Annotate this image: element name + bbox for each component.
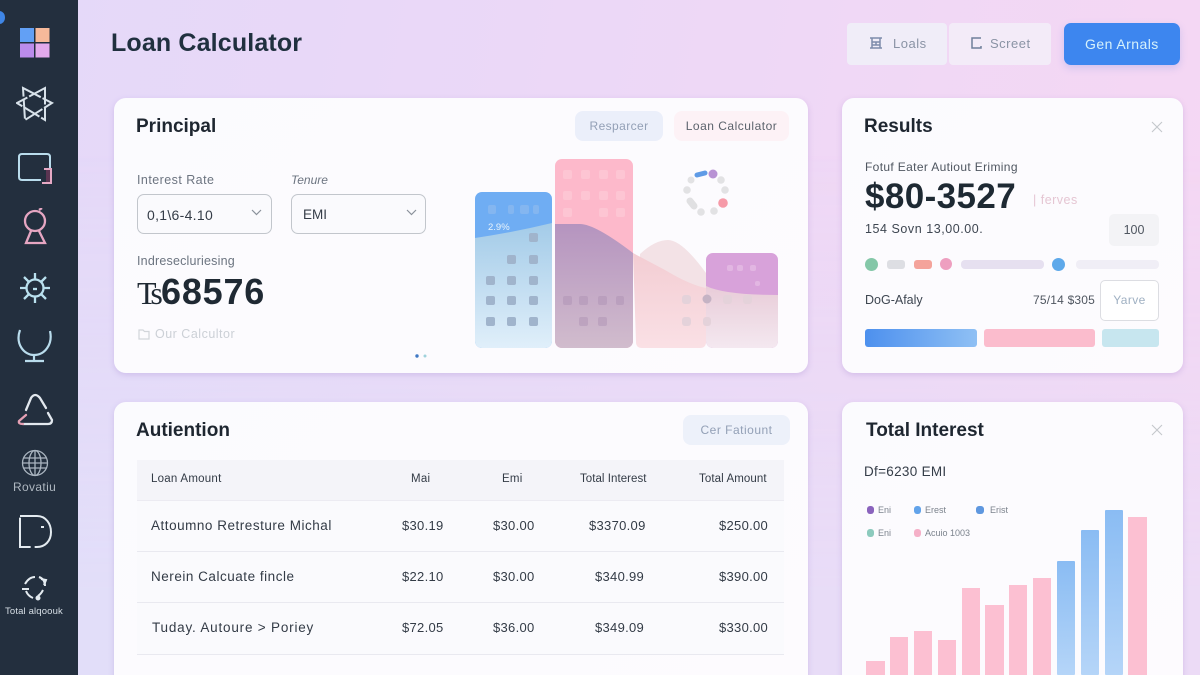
row 3: $330.00 [719, 620, 768, 635]
icon: document [19, 515, 52, 548]
dot grid [486, 233, 538, 326]
row 3: $36.00 [493, 620, 535, 635]
blue bar [475, 192, 552, 348]
button: Gen Arnals [1064, 23, 1180, 65]
select: tenure [291, 194, 426, 234]
row 2: $390.00 [719, 569, 768, 584]
table header row: Total Interest [580, 473, 647, 485]
title: Loan Calculator [111, 29, 302, 57]
button: Yarve [1100, 280, 1159, 321]
icon: share [971, 37, 982, 49]
row value: 75/14 $305 [1033, 293, 1095, 307]
icon: dashboard tiles [20, 28, 50, 58]
icon: globe stand [17, 330, 52, 362]
tab: Cer Fatiount [683, 415, 790, 445]
select: tenure: EMI [303, 207, 327, 222]
icon: device [18, 153, 52, 184]
chart: illustrated bars and area [475, 159, 778, 348]
progress indicators [865, 258, 1159, 271]
row 1: $3370.09 [589, 518, 646, 533]
tab: Loan Calculator: Loan Calculator [686, 119, 777, 133]
button: Yarve: Yarve [1113, 293, 1146, 307]
table header row: Total Amount [699, 473, 767, 485]
purple bar [706, 253, 778, 348]
bar: light blue [1102, 329, 1159, 347]
bar: blue [865, 329, 977, 347]
note: our calculator: Our Calcultor [155, 327, 235, 341]
subtitle: Df=6230 EMI [864, 464, 946, 479]
background wash [810, 518, 1200, 675]
lower area [633, 253, 706, 348]
panel: total interest [842, 402, 1183, 675]
button: Gen Arnals: Gen Arnals [1085, 36, 1159, 52]
row 1: $250.00 [719, 518, 768, 533]
tab: Resparcer: Resparcer [590, 119, 648, 133]
row 1: Attoumno Retresture Michal [151, 518, 332, 533]
row 2 [137, 552, 784, 603]
table header row: Loan Amount [151, 473, 222, 485]
nav label: Total alqoouk [5, 606, 63, 617]
legend: Eni [878, 505, 891, 515]
bar: pink [984, 329, 1095, 347]
hill [640, 240, 706, 300]
label: tenure: Tenure [291, 173, 328, 187]
donut ring [683, 170, 729, 216]
tab: Loan Calculator [674, 111, 789, 141]
heading: total interest: Total Interest [866, 420, 984, 441]
big number: 68576 [161, 271, 265, 312]
panel: principal [114, 98, 808, 373]
button: Screet [949, 23, 1051, 65]
table header row: Mai [411, 473, 430, 485]
row 2: Nerein Calcuate fincle [151, 569, 295, 584]
nav label: Rovatiu [13, 480, 56, 494]
icon: close [1152, 424, 1162, 436]
panel: authentication table [114, 402, 808, 675]
chip: 100: 100 [1124, 223, 1144, 237]
button: Loals [847, 23, 947, 65]
row 1: $30.00 [493, 518, 535, 533]
row label: DoG-Afaly [865, 293, 923, 307]
tag: ferves: | ferves [1033, 193, 1078, 207]
legend: Erest [925, 505, 946, 515]
select: rate: 0,1\6-4.10 [147, 207, 213, 223]
label: result caption: Fotuf Eater Autiout Eriming [865, 160, 1018, 174]
header buttons [847, 23, 1183, 71]
big number: Ts [137, 275, 159, 311]
detail line: 154 Sovn 13,00.00. [865, 222, 983, 236]
row 3: $72.05 [402, 620, 444, 635]
table [137, 460, 784, 655]
table header row [137, 460, 784, 501]
sidebar [0, 0, 78, 675]
table header row: Emi [502, 473, 523, 485]
icon: gear sun [20, 273, 50, 303]
pink bar [555, 159, 633, 348]
label: increase: Indresecluriesing [137, 254, 235, 268]
button: Screet: Screet [990, 36, 1031, 51]
legend [867, 505, 1008, 538]
chart value label: 2.9% [488, 222, 510, 233]
legend: Acuio 1003 [925, 528, 970, 538]
pager dots [415, 354, 426, 358]
row 3: $349.09 [595, 620, 644, 635]
icon: refresh [22, 576, 48, 600]
icon: globe [22, 450, 48, 476]
heading: results: Results [864, 116, 933, 137]
icon: pink ring [24, 208, 47, 244]
row 1 [137, 501, 784, 552]
panel: results [842, 98, 1183, 373]
row 2: $340.99 [595, 569, 644, 584]
row 3: Tuday. Autoure > Poriey [152, 620, 314, 635]
row 2: $22.10 [402, 569, 444, 584]
tab: Cer Fatiount: Cer Fatiount [700, 423, 773, 437]
row 2: $30.00 [493, 569, 535, 584]
heading: autiention: Autiention [136, 420, 230, 441]
status dot [0, 11, 5, 24]
row 3 [137, 603, 784, 655]
icon: triangle [18, 394, 54, 426]
row 1: $30.19 [402, 518, 444, 533]
big result value: $80-3527 [865, 177, 1016, 216]
select: rate [137, 194, 272, 234]
bar chart [866, 510, 1147, 675]
chip: 100 [1109, 214, 1159, 246]
legend: Eni [878, 528, 891, 538]
legend: Erist [990, 505, 1008, 515]
icon: star [16, 86, 54, 122]
button: Loals: Loals [893, 36, 927, 51]
icon: close [1152, 122, 1162, 132]
heading: principal: Principal [136, 116, 216, 137]
label: interest rate: Interest Rate [137, 173, 214, 187]
tab: Resparcer [575, 111, 663, 141]
icon: calendar [870, 37, 882, 49]
